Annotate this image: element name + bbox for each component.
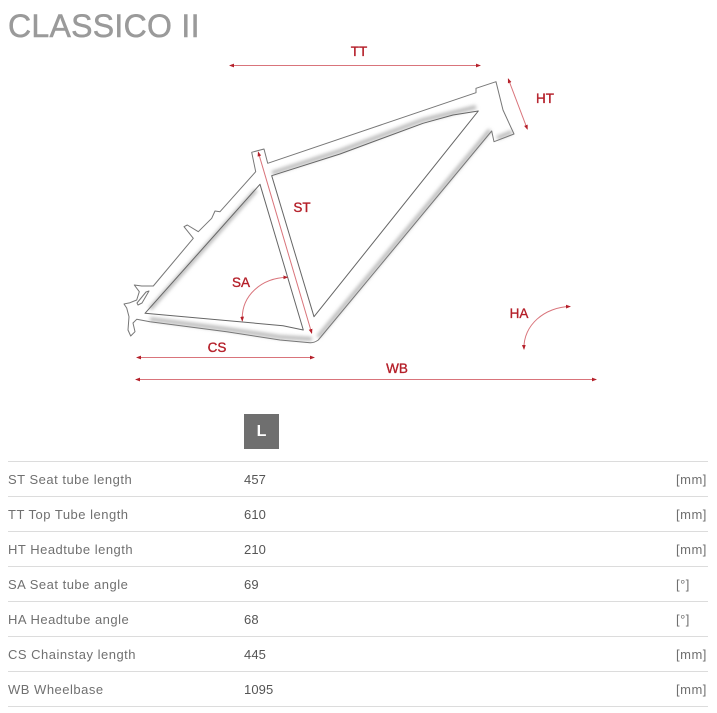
row: HT	[8, 531, 708, 566]
row: HA: [°]	[676, 612, 690, 627]
row: HA: 68	[244, 612, 259, 627]
row: ST: ST Seat tube length	[8, 472, 132, 487]
dimension: HT	[508, 79, 527, 129]
bicycle frame	[124, 82, 514, 343]
row: ST	[8, 461, 708, 496]
row: HT: HT Headtube length	[8, 542, 133, 557]
row: CS: 445	[244, 647, 266, 662]
dimension: WB	[136, 378, 596, 380]
row: TT: [mm]	[676, 507, 707, 522]
row: SA: SA Seat tube angle	[8, 577, 128, 592]
size header L: L	[257, 423, 266, 440]
row: ST: 457	[244, 472, 266, 487]
dimension: ST	[258, 152, 312, 333]
label: TT: TT	[351, 44, 367, 59]
label: HA: HA	[510, 306, 528, 321]
front triangle opening	[272, 111, 478, 317]
row: WB: 1095	[244, 682, 273, 697]
row: SA	[8, 566, 708, 601]
row: WB	[8, 671, 708, 707]
row: TT: TT Top Tube length	[8, 507, 129, 522]
dimension labels	[208, 44, 554, 376]
dimension: CS	[137, 356, 314, 358]
frame outline	[124, 82, 514, 343]
dimension: TT	[230, 64, 480, 66]
row: SA: 69	[244, 577, 259, 592]
row: TT	[8, 496, 708, 531]
row: HA: HA Headtube angle	[8, 612, 129, 627]
row: HT: [mm]	[676, 542, 707, 557]
label: HT: HT	[536, 91, 554, 106]
row: ST: [mm]	[676, 472, 707, 487]
title: CLASSICO II	[8, 8, 200, 44]
row: CS	[8, 636, 708, 671]
row: SA: [°]	[676, 577, 690, 592]
size header L	[244, 414, 279, 449]
angle arc: HA	[524, 306, 570, 349]
label: CS: CS	[208, 340, 226, 355]
rear triangle opening	[145, 184, 303, 330]
row: WB: WB Wheelbase	[8, 682, 104, 697]
row: CS: [mm]	[676, 647, 707, 662]
row: CS: CS Chainstay length	[8, 647, 136, 662]
label: WB: WB	[386, 361, 408, 376]
row: HA	[8, 601, 708, 636]
angle arc: SA	[242, 277, 287, 321]
label: SA: SA	[232, 275, 250, 290]
row: HT: 210	[244, 542, 266, 557]
frame soft shadow	[150, 107, 512, 339]
label: ST: ST	[293, 200, 311, 215]
frame geometry diagram	[124, 44, 597, 382]
row: WB: [mm]	[676, 682, 707, 697]
dropout slot	[137, 291, 149, 305]
row: TT: 610	[244, 507, 266, 522]
dimension lines	[136, 66, 596, 380]
